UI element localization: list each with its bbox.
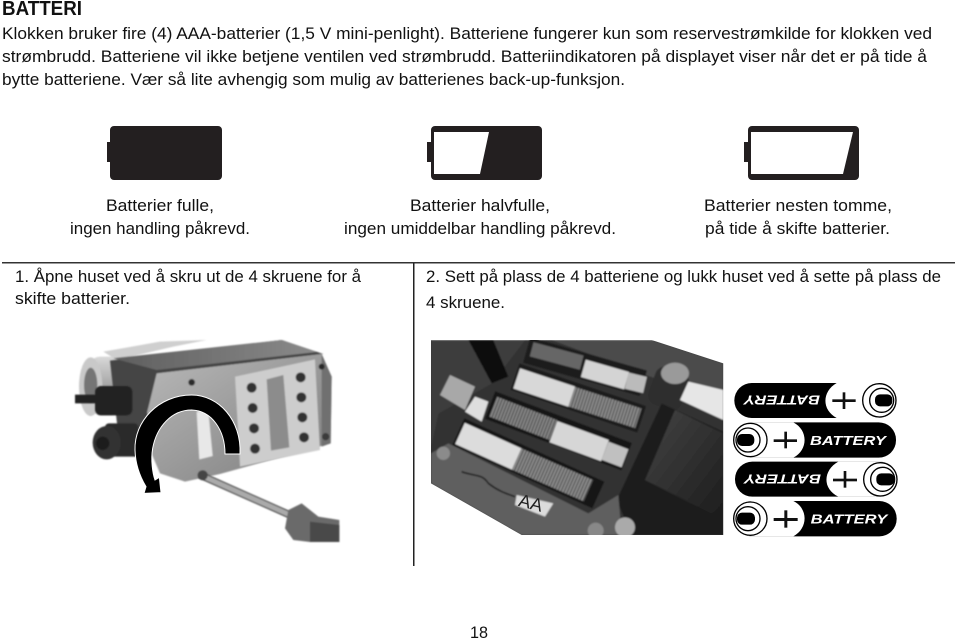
battery 4 bbox=[458, 432, 598, 495]
icon: half battery bbox=[427, 126, 542, 180]
battery 3 bbox=[490, 405, 627, 458]
battery 2 bbox=[515, 377, 642, 419]
photo: open housing with four batteries bbox=[425, 340, 725, 540]
battery symbol 1 (inverted) bbox=[734, 383, 896, 418]
caption: battery half bbox=[344, 196, 616, 238]
step 2 text: 4 skruene. bbox=[426, 293, 505, 312]
step 2 text bbox=[426, 267, 941, 312]
arrow: rotate counter-clockwise bbox=[135, 395, 240, 493]
photo: open housing with four batteries: AA bbox=[517, 490, 545, 516]
intro text block: strømbrudd. Batteriene vil ikke betjene ventilen ved strømbrudd. Batteriindikatoren på displayet viser når det er på tide å bbox=[2, 47, 928, 66]
battery 1 bbox=[527, 349, 645, 385]
screwdriver bbox=[198, 470, 339, 542]
battery symbol 4: BATTERY bbox=[811, 512, 889, 527]
step 1 text: 1. Åpne huset ved å skru ut de 4 skruene for å bbox=[15, 267, 362, 286]
battery symbol 1 (inverted): BATTERY bbox=[743, 393, 820, 408]
battery symbol 2: BATTERY bbox=[810, 433, 887, 448]
icon: full battery bbox=[107, 126, 222, 180]
icon: nearly empty battery bbox=[744, 126, 859, 180]
panel: battery full bbox=[70, 126, 250, 238]
black transformer block bbox=[617, 403, 723, 535]
capacitor (right) bbox=[654, 362, 690, 390]
caption: battery nearly empty: Batterier nesten tomme, bbox=[704, 196, 892, 215]
panel: battery half bbox=[344, 126, 616, 238]
intro text block bbox=[2, 24, 932, 89]
ribbon cable bbox=[440, 375, 475, 410]
intro text block: bytte batteriene. Vær så lite avhengig som mulig av batterienes back-up-funksjon. bbox=[2, 70, 625, 89]
pipe fitting bbox=[79, 340, 207, 416]
step 1 text bbox=[15, 267, 362, 308]
batteries bbox=[458, 349, 645, 495]
capacitor (left) bbox=[468, 340, 508, 383]
step 1 text: skifte batterier. bbox=[15, 289, 130, 308]
battery symbol 3 (inverted): BATTERY bbox=[743, 472, 821, 487]
control panel with display and buttons bbox=[235, 359, 320, 467]
step 2 text: 2. Sett på plass de 4 batteriene og lukk huset ved å sette på plass de bbox=[426, 267, 941, 286]
battery symbol 3 (inverted) bbox=[735, 462, 897, 497]
caption: battery full: Batterier fulle, bbox=[106, 196, 214, 215]
caption: battery nearly empty bbox=[704, 196, 892, 238]
battery symbol 4 bbox=[734, 501, 897, 536]
housing body bbox=[110, 340, 332, 482]
caption: battery nearly empty: på tide å skifte batterier. bbox=[705, 219, 890, 238]
caption: battery full bbox=[70, 196, 250, 238]
caption: battery half: Batterier halvfulle, bbox=[410, 196, 550, 215]
panel: battery nearly empty bbox=[704, 126, 892, 238]
diagram: battery orientation bbox=[734, 383, 897, 536]
caption: battery half: ingen umiddelbar handling påkrevd. bbox=[344, 219, 616, 238]
photo: valve housing with screwdriver bbox=[75, 340, 339, 542]
front wall with handwritten label bbox=[431, 443, 635, 539]
white component label bbox=[680, 382, 723, 420]
intro text block: Klokken bruker fire (4) AAA-batterier (1,5 V mini-penlight). Batteriene fungerer kun som reservestrømkilde for klokken ved bbox=[2, 24, 932, 43]
caption: battery full: ingen handling påkrevd. bbox=[70, 219, 250, 238]
battery symbol 2 bbox=[734, 422, 896, 458]
cable glands bbox=[75, 386, 138, 459]
